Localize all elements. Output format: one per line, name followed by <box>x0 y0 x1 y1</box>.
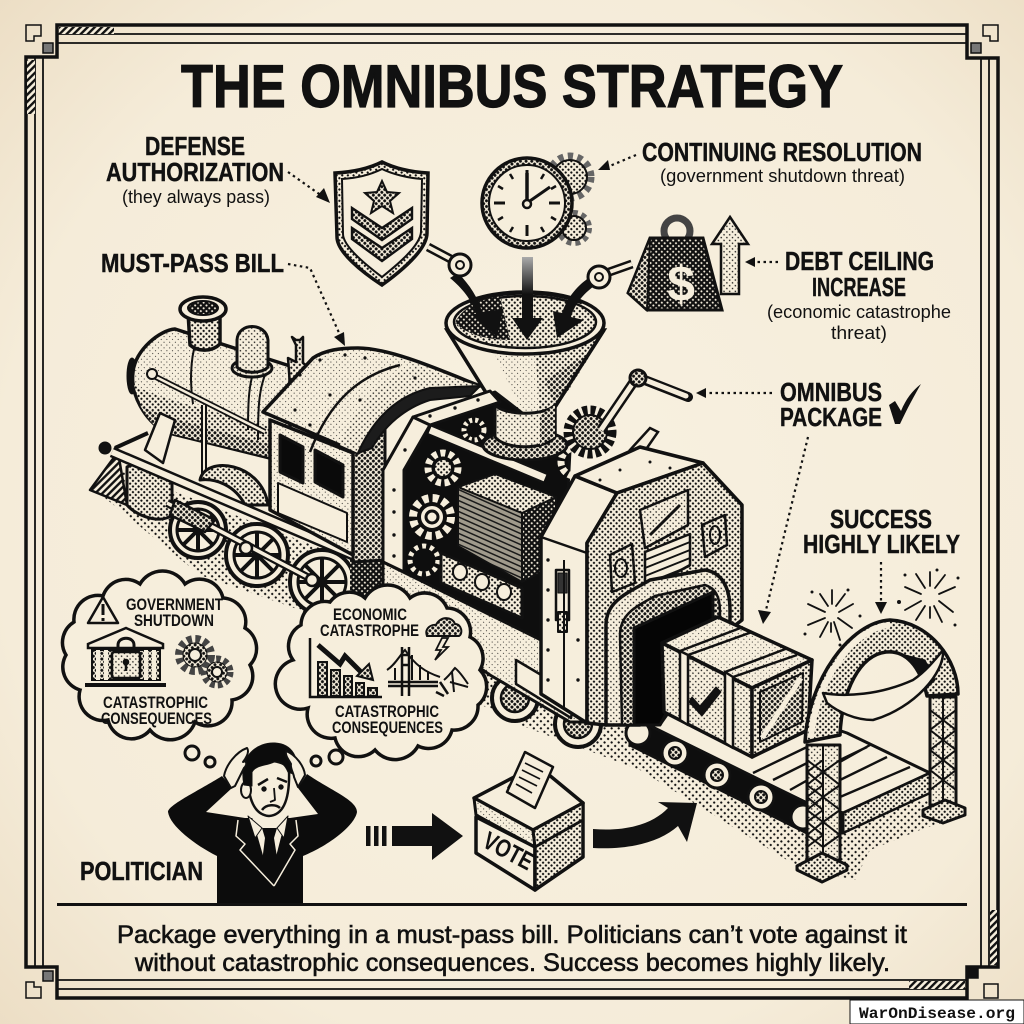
caption: Package everything in a must-pass bill. Politicians can’t vote against it <box>117 921 907 949</box>
icon: falling bar chart <box>310 638 382 697</box>
arrow: politician to vote <box>366 813 463 860</box>
belt side <box>630 716 843 833</box>
icon: debt weight with up arrow: $ <box>667 256 695 312</box>
label: must-pass bill: MUST-PASS BILL <box>101 248 284 278</box>
label: success highly likely: HIGHLY LIKELY <box>803 529 960 559</box>
thought cloud: economic catastrophe: CATASTROPHIC <box>335 702 439 721</box>
label: debt ceiling increase: (economic catastrophe <box>767 302 951 322</box>
slats <box>640 690 930 813</box>
icon: clock with gears <box>482 157 590 248</box>
thought cloud: government shutdown: CATASTROPHIC <box>103 693 208 712</box>
icon: locked building <box>85 628 166 685</box>
whistle <box>288 337 307 385</box>
icon: broken bridge <box>387 647 468 696</box>
caption <box>117 921 907 977</box>
thought cloud: government shutdown: CONSEQUENCES <box>101 709 212 728</box>
shirt and lapels <box>236 810 298 886</box>
label: continuing resolution <box>642 137 922 186</box>
icon: gears <box>179 639 230 685</box>
locomotive <box>90 297 480 614</box>
machine: central compartment <box>383 391 612 747</box>
panels on front <box>610 490 727 592</box>
omnibus package crate <box>662 617 812 757</box>
label: debt ceiling increase <box>767 246 951 343</box>
label: success highly likely <box>803 504 960 559</box>
arch band <box>805 620 958 742</box>
ground shadow halftone <box>105 470 970 880</box>
machine base <box>383 562 595 722</box>
divider line <box>57 903 967 906</box>
crank handle <box>601 370 688 458</box>
icon: debt weight with up arrow <box>628 217 748 312</box>
wheels <box>170 502 385 614</box>
thought cloud: economic catastrophe: CONSEQUENCES <box>332 718 443 737</box>
gears inside <box>410 410 612 574</box>
label: defense authorization: (they always pass) <box>122 187 270 207</box>
steam dome <box>232 326 272 377</box>
plate with circles <box>441 553 522 618</box>
ballot box: VOTE <box>478 827 538 876</box>
label: debt ceiling increase: DEBT CEILING <box>785 246 934 276</box>
thought cloud: government shutdown: SHUTDOWN <box>134 611 214 630</box>
boiler <box>127 329 290 475</box>
watermark: WarOnDisease.org <box>859 1005 1015 1023</box>
label: omnibus package: OMNIBUS <box>780 377 882 407</box>
funnel connector arms <box>428 247 632 276</box>
label: defense authorization: DEFENSE <box>145 131 245 161</box>
watermark <box>850 1000 1024 1024</box>
label: continuing resolution: CONTINUING RESOLUTION <box>642 137 922 167</box>
stack of bills <box>458 474 556 582</box>
machine wheels <box>492 675 601 747</box>
thought cloud: government shutdown <box>62 571 257 740</box>
door arch <box>606 570 730 725</box>
left pillar <box>797 745 847 882</box>
icon: fireworks <box>804 568 960 646</box>
right pillar <box>923 697 965 823</box>
front cylinder and cowcatcher <box>90 413 355 556</box>
frame beams <box>430 430 545 478</box>
success arch with ribbon <box>797 620 965 882</box>
ballot box <box>474 752 583 890</box>
chimney <box>180 297 226 350</box>
ballot paper <box>507 752 553 808</box>
funnel neck flange <box>483 405 567 460</box>
roller end <box>843 773 930 833</box>
label: debt ceiling increase: INCREASE <box>812 272 906 302</box>
funnel <box>446 292 604 432</box>
thought bubbles <box>185 746 343 767</box>
thought cloud: government shutdown: GOVERNMENT <box>126 595 223 614</box>
label: omnibus package: PACKAGE <box>780 402 882 432</box>
conveyor belt <box>626 690 930 833</box>
thought cloud: economic catastrophe <box>275 585 487 760</box>
head and face <box>241 743 297 816</box>
icon: warning triangle <box>88 597 118 623</box>
icon: storm cloud <box>426 618 461 660</box>
machine housing <box>541 447 742 725</box>
label: debt ceiling increase: threat) <box>831 323 887 343</box>
control column <box>556 570 569 632</box>
thought cloud: economic catastrophe: CATASTROPHE <box>320 621 419 640</box>
label: success highly likely: SUCCESS <box>830 504 932 534</box>
hands on head <box>224 748 305 788</box>
thought cloud: economic catastrophe: ECONOMIC <box>333 605 407 624</box>
label: politician: POLITICIAN <box>80 856 203 886</box>
caption: without catastrophic consequences. Success becomes highly likely. <box>134 949 890 977</box>
label: continuing resolution: (government shutdown threat) <box>660 166 905 186</box>
ribbon <box>823 650 943 720</box>
dotted leader arrows <box>288 155 887 624</box>
label: defense authorization <box>106 131 284 207</box>
cab <box>263 348 480 562</box>
arrow: vote to result <box>593 802 697 848</box>
politician figure <box>168 743 357 903</box>
label: omnibus package <box>780 377 921 432</box>
title: THE OMNIBUS STRATEGY <box>181 53 843 120</box>
label: defense authorization: AUTHORIZATION <box>106 157 284 187</box>
arrows: three bills entering funnel <box>449 254 610 340</box>
connecting rod <box>167 500 318 586</box>
icon: defense shield <box>335 162 428 285</box>
